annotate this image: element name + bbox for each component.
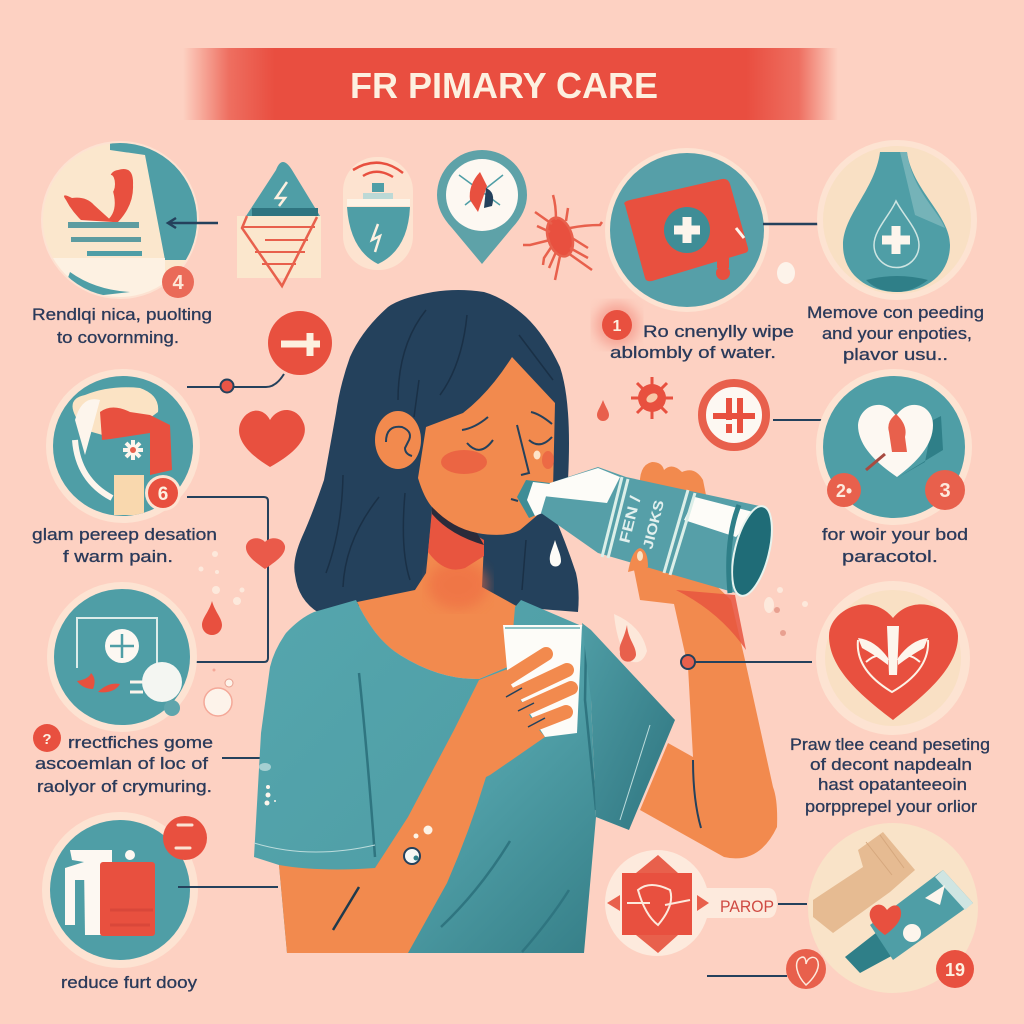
connector: caption line: [222, 757, 260, 759]
connector: arm to heart: [688, 661, 812, 663]
cup: [503, 625, 582, 737]
blush: [441, 450, 487, 474]
text: heart caption: paracotol.: [842, 548, 938, 566]
closed eyes: [462, 412, 552, 450]
icon: droplet small: [597, 400, 609, 421]
mouth mark: [511, 499, 518, 501]
panel: first aid bag: [605, 148, 769, 312]
connector: badge to left panel: [187, 374, 284, 387]
text: document caption: to covornming.: [57, 329, 179, 347]
text: clinic caption: raolyor of crymuring.: [37, 778, 212, 796]
text: droplet caption: plavor usu..: [843, 346, 948, 364]
icon: map pin with insect: [437, 150, 527, 264]
badge 2: [827, 473, 861, 507]
decorative droplets: [614, 587, 808, 662]
ear: [375, 411, 421, 469]
icon: shield battery: [343, 157, 413, 270]
decorative bubbles: [204, 668, 233, 716]
text: head caption: [32, 526, 217, 566]
badge 2: 2•: [836, 481, 852, 501]
text: head caption: glam pereep desation: [32, 526, 217, 544]
elbow crease: [693, 760, 701, 828]
icon: red minus cross badge: [268, 311, 332, 375]
connector: boxes line: [178, 886, 278, 888]
text: heart caption: [822, 526, 968, 566]
chin shadow: [432, 507, 484, 545]
sleeve: [582, 623, 675, 830]
number 4 badge: [162, 266, 194, 298]
text: document caption: Rendlqi nica, puolting: [32, 306, 212, 324]
text: bag caption: ablombly of water.: [610, 344, 776, 362]
panel: large heart: [816, 581, 970, 735]
person: [254, 290, 780, 953]
chest soft shade: [428, 561, 488, 609]
text: boxes caption: reduce furt dooy: [61, 974, 198, 992]
arrow to document panel: [168, 218, 218, 228]
text: bag caption: [595, 303, 794, 362]
text: head caption: f warm pain.: [63, 548, 173, 566]
text: large heart caption: of decont napdealn: [810, 756, 972, 774]
panel: broken heart: [816, 369, 972, 525]
text: bag caption: 1: [613, 318, 622, 335]
panel: plaster and tube: [808, 823, 978, 993]
arm crease: [333, 887, 359, 930]
bottle: JIOKS: [639, 498, 667, 551]
icon: red cross ring: [702, 383, 766, 447]
text: clinic caption: rrectfiches gome: [68, 734, 213, 752]
text: large heart caption: porpprepel your orlior: [805, 798, 978, 816]
fingers: [505, 654, 571, 726]
hair strands: [326, 310, 553, 590]
panel: head profile: [46, 369, 200, 523]
finger creases: [506, 688, 545, 727]
right arm: [632, 560, 777, 858]
number 6 badge: [145, 475, 181, 511]
badge 3: [925, 470, 965, 510]
connector: sign to plaster: [778, 903, 807, 905]
sign label: PAROP: [720, 897, 774, 916]
arm shade: [676, 590, 746, 650]
icon: germ: [631, 377, 673, 419]
text: clinic caption: [33, 724, 213, 796]
thumb: [628, 548, 648, 572]
connector: bracket: [180, 497, 268, 662]
text: document caption: [32, 306, 212, 347]
icon: triangle warning: [237, 162, 321, 286]
panel: document and organ: [40, 140, 205, 300]
icon: red diamond sign: [605, 850, 777, 956]
icon: small heart: [246, 538, 285, 569]
arm marks: [404, 848, 420, 864]
panel: clinic sign: [47, 582, 197, 732]
badge 3: 3: [939, 480, 951, 502]
number 4 badge: 4: [172, 272, 184, 294]
connector: ring to heart: [773, 419, 857, 421]
neck and chest: [357, 513, 520, 679]
hair: [294, 290, 579, 613]
shirt seams: [359, 645, 596, 952]
icon: heart badge: [786, 949, 826, 989]
badge 19: 19: [945, 960, 965, 980]
sleeve hem: [254, 843, 375, 852]
panel: water droplet: [817, 140, 977, 300]
text: droplet caption: and your enpoties,: [822, 325, 972, 343]
icon: red spider: [523, 195, 602, 280]
text: bag caption: Ro cnenylly wipe: [643, 323, 794, 341]
title banner: [183, 48, 838, 120]
number 6 badge: 6: [158, 484, 168, 505]
nose: [517, 425, 529, 475]
title: FR PIMARY CARE: [350, 65, 658, 106]
connector: bag to droplet: [763, 223, 843, 225]
fingers behind bottle: [640, 462, 708, 505]
badge 19: [936, 950, 974, 988]
decorative dots: [198, 551, 244, 605]
icon: decorative bubble: [777, 262, 795, 284]
shirt: [254, 600, 596, 953]
bottle: [517, 467, 780, 600]
text: droplet caption: [807, 304, 984, 364]
icon: heart: [239, 410, 305, 467]
water drop: [550, 540, 561, 566]
text: large heart caption: [790, 736, 990, 816]
icon: droplet: [202, 601, 222, 635]
left arm: [279, 668, 545, 953]
text: large heart caption: hast opatanteeoin: [818, 776, 967, 794]
connector: bottom line: [707, 975, 787, 977]
text: droplet caption: Memove con peeding: [807, 304, 984, 322]
neck shade: [428, 510, 484, 570]
bottle label: FEN /: [616, 493, 645, 545]
text: clinic caption: ?: [42, 731, 52, 748]
text: large heart caption: Praw tlee ceand peseting: [790, 736, 990, 754]
panel: boxes: [42, 812, 207, 968]
text: heart caption: for woir your bod: [822, 526, 968, 544]
face: [418, 357, 555, 535]
text: clinic caption: ascoemlan of loc of: [35, 755, 208, 773]
